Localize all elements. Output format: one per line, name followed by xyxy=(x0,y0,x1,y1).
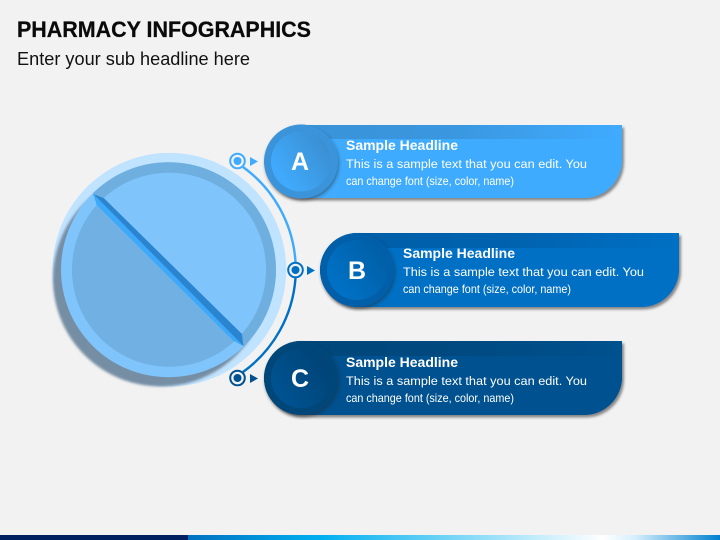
card B body line 2: can change font (size, color, name) xyxy=(403,282,571,296)
arc lower xyxy=(243,278,296,372)
pill shadow xyxy=(53,172,268,386)
pill halo xyxy=(53,153,286,386)
badge A xyxy=(264,124,338,198)
sub headline: Enter your sub headline here xyxy=(17,49,250,69)
card A body line 2: can change font (size, color, name) xyxy=(346,174,514,188)
badge B xyxy=(320,233,394,307)
badge A inner xyxy=(271,132,331,192)
card C top band xyxy=(301,341,622,356)
title: PHARMACY INFOGRAPHICS xyxy=(17,17,311,42)
connector arcs xyxy=(243,167,296,372)
pill face lower half xyxy=(72,173,266,367)
marker C xyxy=(230,371,258,385)
badge B inner xyxy=(327,240,387,300)
card A top band xyxy=(301,125,622,139)
score line dark side xyxy=(93,194,243,346)
letter C: C xyxy=(291,365,309,393)
card B headline: Sample Headline xyxy=(403,245,515,261)
card C inner panel xyxy=(337,356,622,415)
pill upper half xyxy=(92,162,276,346)
card A body line 1: This is a sample text that you can edit. You xyxy=(346,157,587,171)
panel: card B xyxy=(320,233,679,307)
badge C inner xyxy=(271,348,331,408)
marker B xyxy=(288,263,315,277)
badge C xyxy=(264,341,338,415)
card B top band xyxy=(357,233,679,248)
pill illustration xyxy=(53,153,286,386)
card C shape xyxy=(264,341,622,415)
card B inner panel xyxy=(393,248,679,307)
marker A xyxy=(230,154,258,168)
footer bar xyxy=(0,535,720,540)
card A inner panel xyxy=(337,139,622,198)
pill rim xyxy=(61,162,276,377)
letter A: A xyxy=(291,148,309,176)
arc upper xyxy=(243,167,296,262)
letter B: B xyxy=(348,257,366,285)
panel: card C xyxy=(264,341,622,415)
card B shape xyxy=(320,233,679,307)
panel: card A xyxy=(264,124,622,198)
card A shape xyxy=(265,125,622,198)
score line light side xyxy=(93,194,243,346)
card A headline: Sample Headline xyxy=(346,137,458,153)
card C headline: Sample Headline xyxy=(346,354,458,370)
card C body line 1: This is a sample text that you can edit. You xyxy=(346,374,587,388)
card C body line 2: can change font (size, color, name) xyxy=(346,391,514,405)
card B body line 1: This is a sample text that you can edit. You xyxy=(403,265,644,279)
